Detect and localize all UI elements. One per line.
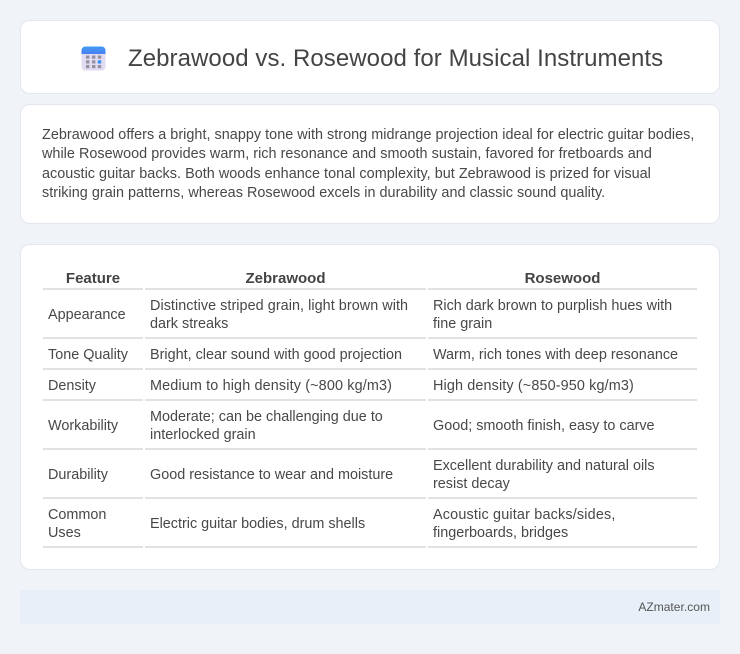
row: density: Density [48,378,96,394]
row: density: Medium to high density (~800 kg/m3) [150,378,392,394]
row: tone quality: Tone Quality [48,347,128,363]
row: workability [43,409,697,450]
summary text: while Rosewood provides warm, rich resonance and smooth sustain, favored for fretboards and [42,146,652,162]
table header row [43,270,697,290]
row: appearance: dark streaks [150,316,228,332]
row: common uses [43,507,697,548]
row: density [43,378,697,401]
panel: header [20,20,720,94]
row: durability: Durability [48,467,108,483]
row: density: High density (~850-950 kg/m3) [433,378,634,394]
table header row: Zebrawood [245,270,326,287]
row: workability: Moderate; can be challenging due to [150,409,383,425]
panel: comparison table [20,244,720,570]
row: durability [43,458,697,499]
title: Zebrawood vs. Rosewood for Musical Instruments [128,45,663,72]
row: common uses: Uses [48,525,81,541]
row: common uses: fingerboards, bridges [433,525,568,541]
icon: calendar [82,46,106,70]
summary text: striking grain patterns, whereas Rosewood excels in durability and classic sound quality. [42,185,605,201]
summary text: acoustic guitar backs. Both woods enhance tonal complexity, but Zebrawood is prized for visual [42,166,651,182]
footer bar [20,590,720,624]
panel: summary [20,104,720,224]
row: appearance: fine grain [433,316,492,332]
row: appearance: Distinctive striped grain, light brown with [150,298,408,314]
row: tone quality: Bright, clear sound with good projection [150,347,402,363]
table header row: Rosewood [525,270,600,287]
row: tone quality: Warm, rich tones with deep resonance [433,347,678,363]
row: common uses: Common [48,507,106,523]
footer credit: AZmater.com [638,600,710,614]
summary text [42,127,694,201]
summary text: Zebrawood offers a bright, snappy tone with strong midrange projection ideal for electric guitar bodies, [42,127,694,143]
row: durability: Excellent durability and natural oils [433,458,655,474]
row: common uses: Acoustic guitar backs/sides, [433,507,616,523]
row: tone quality [43,347,697,370]
row: common uses: Electric guitar bodies, drum shells [150,516,365,532]
row: workability: interlocked grain [150,427,256,443]
row: appearance: Rich dark brown to purplish hues with [433,298,672,314]
row: appearance [43,298,697,339]
row: workability: Workability [48,418,118,434]
row: durability: Good resistance to wear and moisture [150,467,393,483]
row: durability: resist decay [433,476,510,492]
row: appearance: Appearance [48,307,126,323]
row: workability: Good; smooth finish, easy to carve [433,418,655,434]
table header row: Feature [66,270,120,287]
